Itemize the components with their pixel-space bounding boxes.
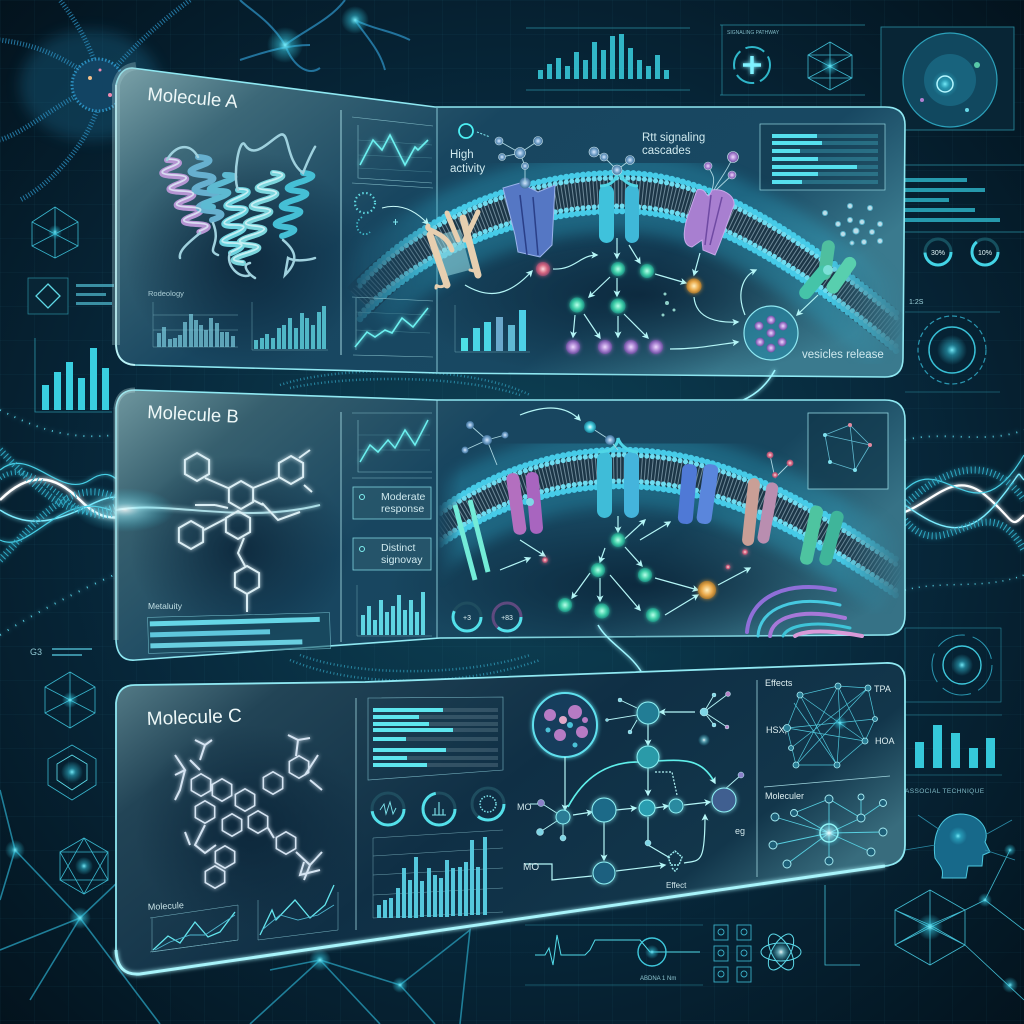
bar chart A2	[252, 302, 328, 350]
panel B shading	[75, 390, 890, 655]
signaling label	[642, 132, 705, 157]
right caption and head icon	[905, 788, 1015, 878]
high activity label: High	[450, 149, 474, 161]
distinct signovay box	[353, 538, 431, 570]
signaling label: Rtt signaling	[642, 132, 705, 144]
heading C: Molecule C	[146, 706, 242, 730]
labels pathway C: MO	[517, 802, 532, 812]
right donuts: 30%	[931, 250, 945, 257]
donuts B: +83	[501, 615, 513, 622]
labels pathway C: Effect	[666, 881, 687, 890]
line chart B	[352, 413, 432, 478]
nodes C	[536, 692, 744, 884]
petri dish	[533, 693, 597, 757]
right stacked target and bars	[905, 628, 1002, 775]
panel C glass	[116, 663, 905, 974]
right target circle	[905, 299, 1000, 392]
ligands A	[495, 136, 738, 190]
line chart A1	[352, 117, 433, 188]
horizontal bars C	[368, 697, 503, 780]
metaluity bars: Metaluity	[148, 601, 183, 611]
left small labels and hexagons	[30, 647, 108, 894]
divider C right	[757, 680, 890, 877]
pathway arrows A	[465, 238, 818, 349]
small particles	[662, 292, 676, 316]
high activity label: activity	[450, 163, 485, 175]
mini line charts C	[148, 885, 338, 952]
dots cloud	[822, 204, 882, 245]
panel C shading	[116, 725, 885, 974]
protein blue	[503, 178, 555, 257]
top dashboard bar chart	[526, 28, 690, 90]
molecule B structure	[179, 450, 312, 612]
distinct signovay box: signovay	[381, 554, 423, 566]
distinct signovay box: Distinct	[381, 542, 416, 554]
labels pathway C: MO	[523, 862, 539, 873]
line chart A2	[352, 297, 433, 357]
bar chart A1	[153, 302, 238, 347]
bottom right hex network	[825, 844, 1024, 1000]
ligands B	[462, 421, 794, 478]
metaluity bars	[148, 601, 331, 653]
protein purple	[684, 189, 734, 255]
panel A shading	[116, 66, 880, 380]
high activity label	[450, 124, 490, 175]
connections C	[525, 694, 741, 880]
panel A glass	[116, 68, 905, 377]
network box B	[808, 413, 888, 489]
bar chart B	[357, 585, 432, 636]
moleculer network: Moleculer	[765, 791, 804, 801]
pathway arrows B	[500, 408, 750, 615]
right target circle: 1:2S	[909, 299, 924, 306]
moderate response box: response	[381, 503, 424, 515]
top right cell box	[881, 27, 1014, 130]
labels pathway C	[517, 802, 745, 890]
bars panel A	[760, 124, 885, 190]
signaling nodes A	[536, 262, 702, 354]
bottom ECG chart	[525, 925, 703, 985]
protein cyan	[599, 170, 639, 243]
effects network: Effects	[765, 678, 793, 688]
right caption and head icon: ASSOCIAL TECHNIQUE	[905, 788, 985, 795]
neuron top left	[0, 0, 410, 200]
left icon and text rows	[28, 278, 114, 314]
right donuts	[925, 239, 998, 265]
heading B: Molecule B	[147, 401, 239, 427]
bottom left network	[0, 790, 470, 1024]
heading A: Molecule A	[147, 83, 239, 112]
left hexagon network	[32, 207, 78, 258]
protein tan	[428, 212, 478, 288]
bottom atom icon	[761, 930, 801, 974]
right wave	[905, 430, 1024, 590]
panel: Molecule C	[116, 663, 905, 974]
divider B	[340, 412, 342, 642]
protein helices	[162, 134, 315, 278]
molecule C structure	[175, 735, 322, 888]
donuts C	[372, 788, 504, 825]
left small labels and hexagons: G3	[30, 647, 42, 657]
connector glow A to B	[598, 370, 775, 426]
vesicle	[744, 306, 798, 360]
signaling label: cascades	[642, 145, 691, 157]
connector glow B to C	[598, 625, 648, 700]
organelle	[747, 587, 862, 636]
moleculer network	[765, 791, 887, 868]
caption Rodeology: Rodeology	[148, 289, 184, 298]
top dashboard plus icon and network: SIGNALING PATHWAY	[727, 30, 780, 36]
effects network: TPA	[874, 684, 891, 694]
donuts B	[453, 603, 521, 631]
top dashboard plus icon and network	[720, 25, 865, 95]
labels pathway C: eg	[735, 826, 745, 836]
vesicle label: vesicles release	[802, 349, 884, 361]
protein green	[797, 239, 859, 302]
central sphere behind panels	[280, 371, 540, 681]
bottom icon grid	[714, 925, 751, 982]
nodes B	[542, 533, 748, 622]
moderate response box: Moderate	[381, 491, 426, 503]
panel: Molecule A	[116, 66, 905, 380]
membrane B	[440, 444, 898, 600]
bar chart C	[373, 830, 503, 918]
panel B glass	[116, 390, 905, 660]
panel: Molecule B	[75, 390, 905, 660]
divider C left	[355, 698, 357, 930]
bead ring and arrow	[355, 193, 428, 234]
moderate response box	[353, 487, 431, 519]
divider A	[340, 110, 342, 355]
left wave	[0, 410, 160, 635]
effects network: HOA	[875, 736, 895, 746]
bottom ECG chart: ABDNA 1 Nm	[640, 976, 676, 982]
left bar chart	[35, 338, 112, 412]
right dashboard bars	[905, 165, 1024, 232]
effects network	[765, 678, 895, 768]
donuts B: +3	[463, 615, 471, 622]
proteins B	[455, 438, 845, 580]
right donuts: 10%	[978, 250, 992, 257]
mini line charts C: Molecule	[148, 900, 184, 912]
effects network: HSX,	[766, 725, 787, 735]
membrane A	[360, 173, 900, 354]
bar chart A3	[455, 305, 530, 352]
